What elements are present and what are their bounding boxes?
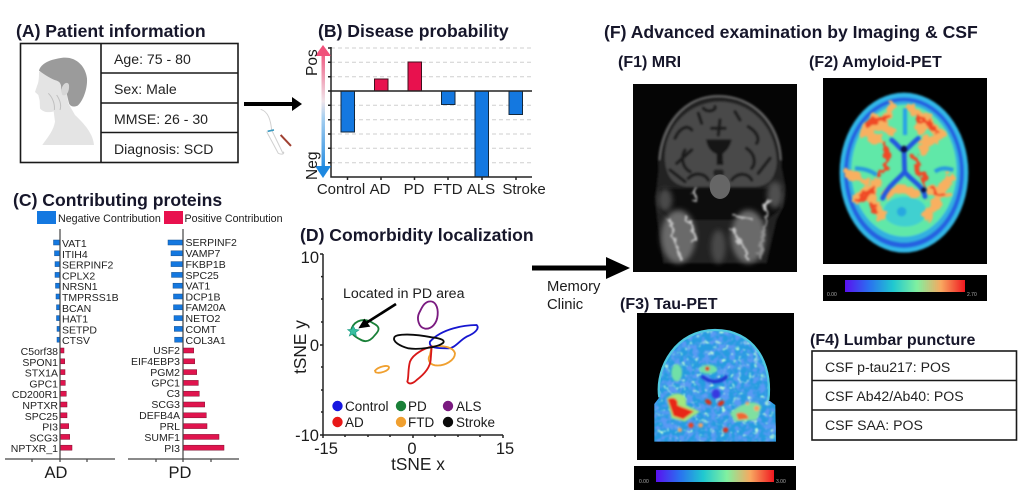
labels: PD negative proteins: COMT	[186, 324, 217, 336]
heading: F3 Tau-PET: (F3) Tau-PET	[620, 296, 718, 313]
labels: AD negative proteins: SERPINF2	[62, 260, 114, 272]
contour: AD	[407, 347, 432, 383]
marker: patient star	[348, 326, 359, 336]
arrow: A to B	[244, 97, 302, 111]
legend: disease colours: PD	[408, 399, 427, 414]
legend: disease colours: Control	[345, 399, 389, 414]
colorbar: Amyloid-PET scale: 2.70	[967, 292, 977, 298]
text: Memory Clinic: Clinic	[547, 297, 584, 313]
labels: PD negative proteins: SPC25	[186, 270, 219, 282]
bar: Control	[341, 91, 354, 132]
colorbar: Amyloid-PET scale	[823, 275, 987, 301]
labels: AD negative proteins: NRSN1	[62, 281, 98, 293]
text: Memory Clinic: Memory	[547, 279, 601, 295]
axis title: tSNE x: tSNE x	[391, 454, 445, 474]
title: (F) Advanced examination: (F) Advanced examination by Imaging & CSF	[604, 22, 978, 42]
text: CSF p-tau217: CSF p-tau217: POS	[825, 359, 950, 375]
labels: PD negative proteins: DCP1B	[186, 292, 221, 304]
labels: PD positive proteins: C3	[167, 388, 180, 400]
bar: PD	[408, 62, 422, 91]
axis tick labels: -10	[295, 427, 319, 445]
arrow: to patient location	[358, 304, 396, 328]
labels: AD negative proteins: VAT1	[62, 238, 87, 250]
axis label: Neg: Neg	[304, 152, 321, 180]
labels: PD negative proteins: NETO2	[186, 313, 220, 325]
text: MMSE: MMSE: 26 - 30	[114, 111, 208, 127]
labels: AD positive proteins: NPTXR	[22, 400, 58, 412]
axis tick labels: 0	[310, 337, 319, 355]
labels: AD positive proteins	[11, 346, 58, 455]
axis tick labels: 10	[301, 249, 319, 267]
colorbar: Tau-PET scale	[634, 466, 796, 490]
labels: AD positive proteins: SCG3	[29, 432, 58, 444]
axis labels: diseases: AD	[370, 181, 391, 198]
text: Memory Clinic	[547, 279, 601, 313]
image: MRI coronal scan	[633, 84, 797, 272]
chart: tSNE comorbidity plot	[290, 249, 514, 474]
labels: AD negative proteins	[62, 238, 119, 347]
legend: disease colours: Stroke	[456, 415, 495, 430]
labels: AD negative proteins: CTSV	[62, 335, 90, 347]
icon: patient head profile	[35, 58, 94, 145]
labels: PD positive proteins: DEFB4A	[139, 410, 180, 422]
labels: PD negative proteins: FAM20A	[186, 302, 226, 314]
contour: Control	[430, 325, 478, 348]
labels: AD negative proteins: BCAN	[62, 303, 91, 315]
labels: AD positive proteins: SPC25	[25, 411, 58, 423]
axis label: AD: AD	[45, 464, 68, 482]
axis tick labels	[295, 249, 514, 458]
arrow: to memory clinic	[532, 257, 630, 279]
arrow: positive to negative scale	[315, 45, 331, 178]
axis tick labels: 15	[496, 440, 514, 458]
title: (B) Disease probability: (B) Disease probability	[318, 21, 509, 41]
axis labels: diseases	[317, 181, 546, 198]
title: (C) Contributing proteins: (C) Contributing proteins	[13, 190, 222, 210]
labels: AD positive proteins: GPC1	[29, 378, 58, 390]
contour: Stroke	[394, 335, 444, 349]
bar: ALS	[475, 91, 488, 177]
labels: AD negative proteins: SETPD	[62, 324, 97, 336]
labels: PD positive proteins	[131, 345, 180, 455]
panel: patient information table	[20, 44, 238, 162]
labels: AD negative proteins: CPLX2	[62, 270, 95, 282]
image: Tau-PET coronal scan	[637, 313, 794, 460]
text: CSF SAA: CSF SAA: POS	[825, 417, 923, 433]
axis labels: diseases: ALS	[467, 181, 495, 198]
labels: AD positive proteins: STX1A	[25, 368, 58, 380]
chart: PD protein contributions	[128, 229, 239, 482]
labels: PD positive proteins: GPC1	[151, 378, 180, 390]
legend: disease colours: FTD	[408, 415, 434, 430]
colorbar: Amyloid-PET scale: 0.00	[827, 292, 837, 298]
text: age: Age: 75 - 80	[114, 51, 191, 67]
callout: located in PD area: Located in PD area	[343, 286, 465, 302]
text: sex: Sex: Male	[114, 81, 177, 97]
heading: F2 Amyloid-PET: (F2) Amyloid-PET	[809, 54, 942, 71]
legend: disease colours: AD	[345, 415, 364, 430]
colorbar: Tau-PET scale: 3.00	[776, 479, 786, 485]
axis labels: diseases: FTD	[433, 181, 463, 198]
contour: ALS	[418, 301, 438, 329]
legend: disease colours	[332, 399, 495, 430]
labels: AD negative proteins: ITIH4	[62, 249, 88, 261]
labels: PD positive proteins: PGM2	[150, 367, 180, 379]
axis labels: diseases: Stroke	[502, 181, 546, 198]
colorbar: Tau-PET scale: 0.00	[639, 479, 649, 485]
contours	[348, 301, 478, 383]
axis label: Pos: Pos	[304, 49, 321, 76]
axis labels: diseases: Control	[317, 181, 365, 198]
labels: PD positive proteins: PI3	[164, 443, 180, 455]
labels: AD positive proteins: C5orf38	[21, 346, 58, 358]
legend: contribution colours: Negative Contribution	[58, 213, 161, 225]
axis tick labels: -15	[314, 440, 338, 458]
bar: AD	[374, 79, 388, 91]
labels: PD positive proteins: PRL	[160, 421, 180, 433]
labels: PD positive proteins: USF2	[153, 345, 180, 357]
heading: F1 MRI: (F1) MRI	[618, 54, 681, 71]
text: CSF Ab42/Ab40: CSF Ab42/Ab40: POS	[825, 388, 964, 404]
title: (D) Comorbidity localization: (D) Comorbidity localization	[300, 225, 534, 245]
text: diagnosis: Diagnosis: SCD	[114, 141, 213, 157]
panel: lumbar puncture results	[812, 351, 1016, 440]
labels: AD negative proteins: HAT1	[62, 314, 88, 326]
title: (A) Patient information: (A) Patient information	[16, 21, 206, 41]
bar: Stroke	[509, 91, 522, 114]
labels: PD negative proteins: VAT1	[186, 280, 210, 292]
axis label: PD: PD	[169, 464, 192, 482]
labels: PD positive proteins: SCG3	[151, 399, 180, 411]
labels: PD negative proteins	[186, 237, 237, 347]
chart: disease probability bars	[304, 45, 546, 198]
legend: disease colours: ALS	[456, 399, 482, 414]
labels: AD negative proteins: TMPRSS1B	[62, 292, 119, 304]
axis title: tSNE y: tSNE y	[290, 320, 310, 374]
labels: PD positive proteins: SUMF1	[144, 432, 180, 444]
labels: AD positive proteins: CD200R1	[12, 389, 58, 401]
contour: PD	[351, 320, 379, 341]
labels: PD negative proteins: COL3A1	[186, 335, 226, 347]
icon: blood draw arm	[261, 109, 291, 154]
bar: FTD	[442, 91, 455, 104]
labels: PD negative proteins: SERPINF2	[186, 237, 237, 249]
labels: PD negative proteins: FKBP1B	[186, 259, 226, 271]
labels: AD positive proteins: SPON1	[22, 357, 58, 369]
legend: contribution colours	[37, 211, 283, 225]
labels: AD positive proteins: PI3	[42, 422, 58, 434]
heading: F4 Lumbar puncture: (F4) Lumbar puncture	[810, 332, 975, 349]
legend: contribution colours: Positive Contribution	[184, 213, 283, 225]
contour: FTD	[375, 346, 455, 373]
labels: PD negative proteins: VAMP7	[186, 248, 220, 260]
axis labels: diseases: PD	[404, 181, 425, 198]
image: Amyloid-PET axial scan	[823, 78, 987, 264]
chart: AD protein contributions	[5, 229, 119, 482]
axis tick labels: 0	[407, 440, 417, 458]
labels: PD positive proteins: EIF4EBP3	[131, 356, 180, 368]
labels: AD positive proteins: NPTXR_1	[11, 443, 58, 455]
